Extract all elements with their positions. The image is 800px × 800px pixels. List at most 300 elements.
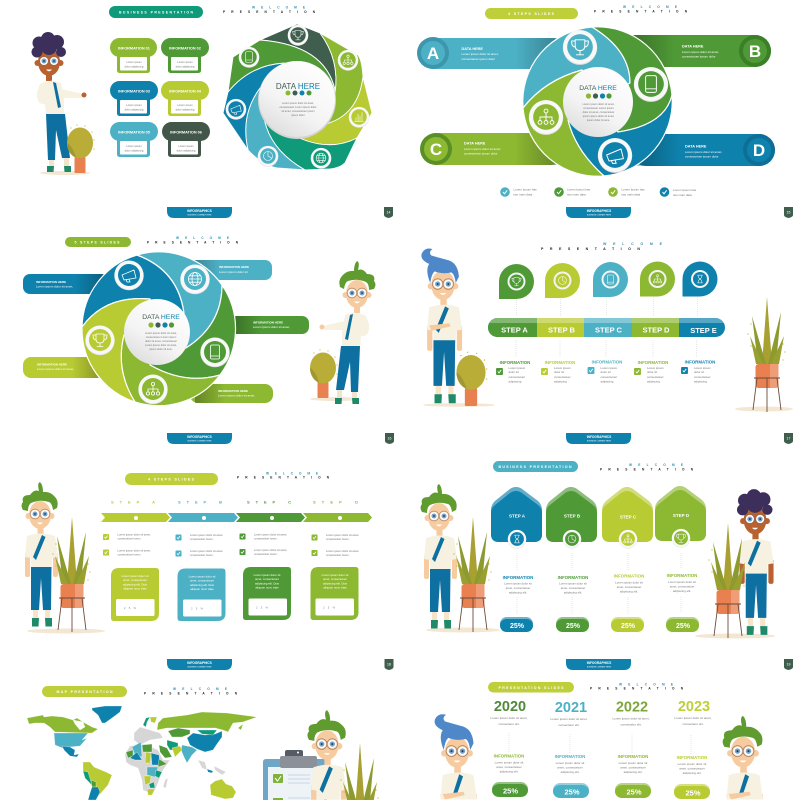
column 2022: 2022 <box>616 700 648 716</box>
checklists: consectetuer lorem. <box>190 537 214 541</box>
column 2021 <box>550 700 589 798</box>
step labels: STEP C <box>247 500 291 504</box>
center circle: data here: DATA HERE <box>579 85 617 92</box>
column 2022: amet, consectetuer <box>620 766 646 770</box>
page number badge: 16 <box>388 436 391 440</box>
footer tab <box>167 207 232 218</box>
information text columns <box>503 573 697 594</box>
checklist row: two main data <box>622 192 641 196</box>
step bar: STEP B <box>548 326 576 334</box>
checklists: Lorem ipsum dolor sit amet, <box>326 549 359 553</box>
welcome heading <box>237 472 330 480</box>
percentage pills: 25% <box>566 623 581 630</box>
bar: lower right: INFORMATION HERE <box>218 389 248 393</box>
bar: middle right: Lorem ipsum dolor sit amet, <box>253 325 290 329</box>
bar B: Lorem ipsum dolor sit amet, <box>682 50 719 54</box>
heading pill: 5 STEPS SLIDES <box>74 240 120 244</box>
chevron arrows <box>101 513 372 522</box>
column 2023: adipiscing elit. <box>683 771 702 775</box>
information columns <box>496 360 715 384</box>
checklists: consectetuer lorem. <box>118 536 141 540</box>
seven-blade swirl diagram <box>223 24 372 170</box>
bar: top right <box>185 260 272 280</box>
information columns: adipiscing <box>554 380 567 384</box>
page number badge: 15 <box>787 210 790 214</box>
bar: lower left: INFORMATION HERE <box>37 362 67 366</box>
heading pill: MAP PRESENTATION <box>56 690 113 694</box>
center circle: data here <box>258 61 336 139</box>
card 06: dolor adipiscing <box>177 148 196 152</box>
checklist row: Lorem Ipsum has <box>514 188 537 192</box>
center circle: data here: DATA HERE <box>276 82 320 91</box>
bar B: consectetuer ipsum dolor <box>682 54 716 58</box>
bar: top left: Lorem ipsum dolor sit amet, <box>36 284 73 288</box>
page number badge: 18 <box>387 662 391 666</box>
cards: 25% <box>124 606 136 610</box>
slide 18: four step arrows <box>22 472 394 670</box>
cards: amet, consectetuer <box>123 578 147 582</box>
footer tab: BUSINESS COMPANY HERE <box>587 214 612 216</box>
four-blade swirl diagram <box>523 27 672 176</box>
potted plant on stand <box>708 523 747 638</box>
center circle: data here: ipsum ipsum dolor sit amet, <box>583 114 615 118</box>
checklists: consectetuer lorem. <box>326 553 350 557</box>
bar D: DATA HERE <box>685 144 707 148</box>
step labels: STEP A <box>111 500 155 504</box>
heading pill <box>109 6 203 18</box>
information text columns: adipiscing elit. <box>564 590 582 594</box>
checklist row: Lorem Ipsum has <box>567 188 591 192</box>
pin markers <box>499 262 718 299</box>
footer tab: INFOGRAPHICS <box>187 209 212 213</box>
step bar <box>488 318 725 337</box>
card 01: Lorem ipsum <box>126 60 143 64</box>
slide 17: step timeline <box>421 242 793 444</box>
column 2020: Lorem ipsum dolor sit amet, <box>490 716 528 720</box>
bar: lower left: Lorem ipsum dolor sit amet, <box>37 367 74 371</box>
card 03: dolor adipiscing <box>125 108 144 112</box>
bar A: A <box>427 44 439 63</box>
icon: cactus <box>456 352 487 406</box>
cards: adipiscing elit. Duis <box>123 582 148 586</box>
information text columns: amet, consectetuer <box>506 586 530 590</box>
center circle: data here <box>124 299 190 365</box>
icon badges <box>85 260 230 404</box>
potted plant on stand <box>453 517 492 632</box>
heading pill: BUSINESS PRESENTATION <box>498 465 572 469</box>
information columns: Lorem ipsum <box>600 366 618 370</box>
cards: Lorem ipsum dolor sit <box>122 574 149 578</box>
column 2023: 2023 <box>678 699 710 715</box>
column 2023: consectetur elit. <box>682 722 704 726</box>
cards: Lorem ipsum dolor sit <box>254 573 281 577</box>
welcome heading: PRESENTATION <box>590 686 684 690</box>
information columns: adipiscing <box>694 380 707 384</box>
cards: 25% <box>191 606 204 610</box>
cards: Lorem ipsum dolor sit <box>189 574 216 578</box>
column 2021: 25% <box>564 788 580 796</box>
information text columns: adipiscing elit. <box>509 590 527 594</box>
welcome heading: WELCOME <box>603 242 663 246</box>
column 2021: amet, consectetuer <box>557 766 583 770</box>
center circle: data here: consectetuer Lorem ipsum <box>146 335 176 339</box>
column 2020: Lorem ipsum dolor sit <box>495 760 524 764</box>
information text columns: amet, consectetuer <box>670 584 694 588</box>
bar D <box>630 134 775 166</box>
five-blade swirl diagram <box>82 252 236 406</box>
page number badge: 17 <box>787 436 790 440</box>
information text columns: INFORMATION <box>667 573 697 578</box>
column 2020: consectetur elit. <box>498 722 520 726</box>
cards: Lorem ipsum dolor sit <box>322 573 349 577</box>
bar C: Lorem ipsum dolor sit amet, <box>464 147 501 151</box>
bar: lower right <box>190 384 273 403</box>
footer tab: BUSINESS COMPANY HERE <box>587 440 612 442</box>
column 2021: Lorem ipsum dolor sit <box>556 761 584 765</box>
footer tab <box>167 659 232 670</box>
slide 15: four steps <box>417 5 793 218</box>
icon badges <box>529 30 668 173</box>
footer tab: BUSINESS COMPANY HERE <box>188 214 212 216</box>
checklist row: two main data <box>673 193 692 197</box>
bar: lower left <box>23 357 108 378</box>
information columns: INFORMATION <box>500 360 530 365</box>
information columns: INFORMATION <box>545 360 575 365</box>
information text columns: INFORMATION <box>614 574 644 578</box>
heading pill: 4 STEPS SLIDES <box>508 12 555 16</box>
information columns: adipiscing <box>600 380 614 384</box>
page number badge <box>384 659 394 670</box>
welcome heading: PRESENTATION <box>541 247 640 251</box>
cards: adipiscing elit. Duis <box>255 582 280 586</box>
character: green-haired man <box>307 710 346 800</box>
checklists: consectetuer lorem. <box>254 552 278 556</box>
character: green-haired man <box>723 716 763 800</box>
welcome heading: WELCOME <box>619 682 673 686</box>
welcome heading: WELCOME <box>266 472 318 476</box>
information columns: dolor sit <box>600 370 611 374</box>
step bar: STEP A <box>501 326 528 334</box>
bar B <box>620 35 771 67</box>
card 05: INFORMATION 05 <box>118 130 150 134</box>
information text columns: Lorem ipsum dolor sit <box>504 582 532 586</box>
card 03: Lorem ipsum <box>126 103 143 107</box>
house-shaped step cards: STEP C <box>620 514 637 520</box>
percentage pills <box>500 617 699 632</box>
cards: adipiscing elit. Duis <box>190 583 215 587</box>
character: presenter with dark hair <box>32 32 90 175</box>
information text columns: INFORMATION <box>503 575 533 580</box>
house-shaped step cards: STEP D <box>673 513 690 518</box>
column 2022: Lorem ipsum dolor sit <box>619 761 648 765</box>
card 01: dolor adipiscing <box>125 64 144 68</box>
welcome heading: PRESENTATION <box>147 240 239 244</box>
information cards grid <box>110 38 210 157</box>
center circle: data here: consectetuer Lorem ipsum dolor <box>279 105 317 109</box>
center circle: data here: Lorem ipsum dolor sit amet, <box>145 343 177 347</box>
heading pill <box>65 237 131 247</box>
checklists <box>103 532 359 557</box>
bar: top right: INFORMATION HERE <box>219 265 249 269</box>
center circle: data here: Lorem ipsum dolor sit amet, <box>282 101 314 105</box>
footer tab: INFOGRAPHICS <box>587 209 611 213</box>
checklists: Lorem ipsum dolor sit amet, <box>190 549 223 553</box>
checklists: Lorem ipsum dolor sit amet, <box>254 532 287 536</box>
cards: amet, consectetuer <box>323 577 347 581</box>
cards: amet, consectetuer <box>190 578 214 582</box>
card 03 <box>110 81 158 116</box>
page number badge: 19 <box>787 662 790 666</box>
step labels: STEP D <box>313 500 358 504</box>
page number badge <box>784 433 793 444</box>
information columns: consectetuer <box>554 375 571 379</box>
information columns: adipiscing <box>508 380 522 384</box>
checklists: Lorem ipsum dolor sit amet, <box>118 548 151 552</box>
slide 16: five steps <box>23 236 394 444</box>
card 06 <box>162 122 210 157</box>
footer tab: INFOGRAPHICS <box>587 435 611 439</box>
heading pill: BUSINESS PRESENTATION <box>119 10 193 14</box>
page number badge <box>384 207 393 218</box>
information columns: consectetuer <box>508 375 525 379</box>
character: blue-haired man <box>421 249 495 407</box>
house-shaped step cards: STEP B <box>564 514 581 518</box>
column 2020 <box>490 699 528 797</box>
welcome heading <box>144 687 238 696</box>
page number badge: 14 <box>387 210 390 214</box>
information text columns: adipiscing elit. <box>620 590 638 594</box>
bar: lower right: Lorem ipsum dolor sit amet, <box>218 394 255 398</box>
column 2020: amet, consectetuer <box>496 765 522 769</box>
column 2021: adipiscing elit. <box>561 770 580 774</box>
bar D: consectetuer ipsum dolor <box>685 154 719 158</box>
card 04: dolor adipiscing <box>176 108 195 112</box>
information bars <box>23 260 309 403</box>
checklists: consectetuer lorem. <box>118 552 141 556</box>
column 2021: INFORMATION <box>555 754 585 759</box>
welcome heading: PRESENTATION <box>237 476 330 480</box>
welcome heading: WELCOME <box>623 5 677 9</box>
column 2022 <box>612 700 651 798</box>
center circle: data here: Lorem ipsum dolor sit amet, <box>582 102 615 106</box>
card 02: INFORMATION 02 <box>169 46 201 50</box>
card 01 <box>110 38 157 73</box>
checklists: consectetuer lorem. <box>254 536 278 540</box>
potted plant on stand <box>52 517 91 632</box>
check items <box>273 774 310 800</box>
bar: top right: Lorem ipsum dolor sit <box>219 270 248 274</box>
card 05 <box>110 122 158 157</box>
column 2020: 25% <box>503 786 518 796</box>
column 2021: Lorem ipsum dolor sit amet, <box>550 717 588 721</box>
column 2021: consectetur elit. <box>558 723 580 727</box>
step labels: STEP B <box>178 500 222 504</box>
bar: middle right <box>225 316 309 334</box>
information columns: Lorem ipsum <box>508 366 526 370</box>
cards: amet, consectetuer <box>255 577 279 581</box>
slide 20: map presentation <box>27 686 379 800</box>
slide 19: business presentation steps <box>420 461 793 670</box>
character: presenter with green hair <box>310 261 376 404</box>
information columns: consectetuer <box>647 375 664 379</box>
information columns: dolor sit <box>508 370 519 374</box>
heading pill: 4 STEPS SLIDES <box>148 478 195 482</box>
world map <box>27 706 257 800</box>
information columns: consectetuer <box>600 375 617 379</box>
bar A: consectetuer ipsum dolor <box>462 57 495 61</box>
column 2023: INFORMATION <box>677 755 707 760</box>
welcome heading <box>223 6 316 14</box>
card 05: dolor adipiscing <box>125 148 144 152</box>
cards: aliquam nunc vitae <box>255 586 279 590</box>
cards: 25% <box>256 606 268 610</box>
heading pill <box>485 8 578 19</box>
card 05: Lorem ipsum <box>126 144 143 148</box>
information text columns: Lorem ipsum dolor sit <box>559 582 587 586</box>
center circle: data here: Lorem ipsum dolor sit amet, <box>145 331 177 335</box>
information text columns: Lorem ipsum dolor sit <box>615 580 643 584</box>
column 2023: 25% <box>685 788 701 798</box>
welcome heading <box>147 236 239 244</box>
cards: aliquam nunc vitae <box>123 586 147 590</box>
checklist row: Lorem Ipsum has <box>622 188 645 192</box>
center circle: data here: ipsum dolor sit ame. <box>587 118 610 122</box>
welcome heading: PRESENTATION <box>594 10 688 14</box>
welcome heading <box>594 5 688 14</box>
footer tab <box>566 659 631 670</box>
bar A: Lorem ipsum dolor sit amet, <box>462 52 499 56</box>
column 2022: adipiscing elit. <box>624 770 643 774</box>
card 04: Lorem ipsum <box>177 103 194 107</box>
center circle: data here: consectetuer Lorem ipsum <box>583 106 614 110</box>
column 2023 <box>674 699 712 799</box>
information columns: dolor sit <box>554 370 564 374</box>
cards <box>111 567 358 621</box>
heading pill <box>493 461 578 472</box>
center circle: data here: dolor sit amet, consectetuer <box>583 110 615 114</box>
card 02 <box>161 38 209 73</box>
welcome heading: PRESENTATION <box>600 468 694 472</box>
step bar: STEP E <box>690 326 717 335</box>
welcome heading <box>541 242 663 251</box>
welcome heading: WELCOME <box>629 463 683 467</box>
step bar: STEP D <box>643 326 670 334</box>
footer tab: INFOGRAPHICS <box>587 661 611 665</box>
character: green-haired man <box>22 482 105 634</box>
card 04: INFORMATION 04 <box>169 90 202 94</box>
center circle: data here: DATA HERE <box>142 314 180 321</box>
information text columns: adipiscing elit. <box>673 589 691 593</box>
icon: cactus <box>67 124 95 173</box>
bar A: DATA HERE <box>462 47 483 51</box>
checklists: consectetuer lorem. <box>326 537 350 541</box>
information columns: consectetuer <box>694 375 711 379</box>
footer tab <box>566 207 631 218</box>
bar A <box>417 37 568 69</box>
information columns: Lorem ipsum <box>694 366 711 370</box>
checklist row: two main data <box>567 192 586 196</box>
information text columns: Lorem ipsum dolor sit <box>668 580 696 584</box>
page number badge <box>784 659 793 670</box>
information text columns: amet, consectetuer <box>561 586 585 590</box>
house-shaped step cards <box>491 486 706 549</box>
bar C <box>420 133 567 165</box>
checklists: consectetuer lorem. <box>190 553 214 557</box>
information columns: Lorem ipsum <box>554 366 571 370</box>
card 06: INFORMATION 06 <box>170 130 202 134</box>
information columns: INFORMATION <box>685 360 715 364</box>
column 2023: Lorem ipsum dolor sit amet, <box>674 716 712 720</box>
card 03: INFORMATION 03 <box>118 90 150 94</box>
icon: cactus <box>310 349 338 398</box>
heading pill <box>42 686 127 697</box>
bar: middle right: INFORMATION HERE <box>253 320 283 324</box>
footer tab: INFOGRAPHICS <box>187 435 212 439</box>
heading pill <box>125 473 218 485</box>
footer tab: INFOGRAPHICS <box>187 661 212 665</box>
checklist row: two main data <box>514 192 533 196</box>
card 01: INFORMATION 01 <box>118 46 150 50</box>
step labels <box>111 500 358 504</box>
column 2023: Lorem ipsum dolor sit <box>678 762 706 766</box>
bar C: consectetuer ipsum dolor <box>464 152 498 156</box>
center circle: data here: ipsum dolor sit ame. <box>149 347 173 351</box>
percentage pills: 25% <box>676 623 691 630</box>
column 2022: 25% <box>626 788 642 796</box>
information text columns: INFORMATION <box>558 575 588 580</box>
slide 21: yearly presentation <box>435 682 763 800</box>
year columns <box>490 699 712 799</box>
bar: top left <box>23 274 108 294</box>
column 2022: consectetur elit. <box>620 722 642 726</box>
icon badges <box>226 25 369 169</box>
page number badge <box>784 207 793 218</box>
cards: aliquam nunc vitae <box>323 586 347 590</box>
information columns: dolor sit <box>694 370 704 374</box>
heading pill <box>488 682 574 692</box>
slide 14: business presentation <box>32 6 393 218</box>
bar B: DATA HERE <box>682 44 704 48</box>
percentage pills: 25% <box>510 623 525 630</box>
welcome heading <box>600 463 694 472</box>
card 06: Lorem ipsum <box>178 144 195 148</box>
welcome heading <box>590 682 684 690</box>
center circle: data here <box>563 67 633 137</box>
bar B: B <box>749 42 761 61</box>
bar C: DATA HERE <box>464 142 486 146</box>
welcome heading: PRESENTATION <box>144 692 238 696</box>
cards: 25% <box>323 606 336 610</box>
percentage pills: 25% <box>621 623 636 630</box>
footer tab: BUSINESS COMPANY HERE <box>188 666 212 668</box>
column 2020: 2020 <box>494 699 526 715</box>
checklists: Lorem ipsum dolor sit amet, <box>254 548 287 552</box>
column 2022: INFORMATION <box>618 754 648 759</box>
bar C: C <box>430 140 442 159</box>
step bar: STEP C <box>595 326 623 334</box>
house-shaped step cards: STEP A <box>509 514 526 518</box>
checklist row: Lorem Ipsum has <box>673 188 697 192</box>
character: dark-haired man <box>695 489 775 638</box>
welcome heading: WELCOME <box>173 687 227 691</box>
welcome heading: WELCOME <box>252 6 305 10</box>
card 04 <box>161 81 209 116</box>
potted plant on stand <box>735 297 793 412</box>
character: blue-haired man <box>435 714 477 800</box>
column 2020: adipiscing elit. <box>500 770 519 774</box>
column 2020: INFORMATION <box>494 754 524 758</box>
information columns: INFORMATION <box>638 360 668 365</box>
